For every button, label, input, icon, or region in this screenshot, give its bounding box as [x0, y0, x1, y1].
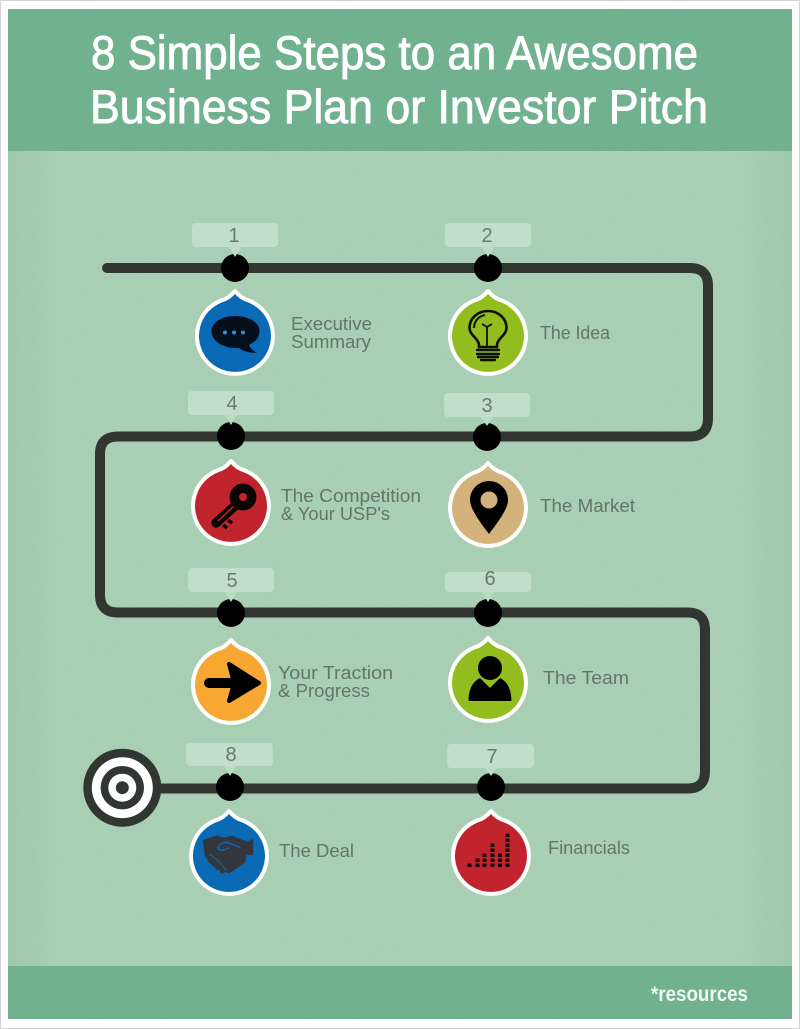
number tag 5	[188, 568, 274, 627]
step 2: The Idea	[445, 223, 611, 374]
number tag 1: 1	[228, 225, 240, 247]
label: Summary	[291, 332, 371, 352]
label: The Idea	[540, 323, 611, 343]
step 8: The Deal	[186, 743, 354, 894]
icon: map pin	[450, 463, 526, 546]
label: Financials	[548, 838, 630, 858]
number tag 4: 4	[226, 393, 238, 415]
label: Your Traction	[278, 663, 393, 683]
label: The Deal	[279, 841, 354, 861]
number tag 2	[445, 223, 531, 282]
label: Executive	[291, 314, 372, 334]
title	[90, 26, 708, 133]
number tag 6: 6	[484, 568, 496, 590]
winding road path	[100, 268, 708, 788]
title: 8 Simple Steps to an Awesome	[91, 26, 698, 79]
icon: arrow	[193, 640, 269, 723]
label: The Competition	[281, 486, 421, 506]
icon: bar chart	[453, 811, 529, 894]
number tag 7	[447, 744, 534, 801]
icon: key	[193, 461, 269, 544]
icon: speech bubble	[197, 291, 273, 374]
icon: handshake	[191, 811, 267, 894]
step 7: Financials	[447, 744, 630, 894]
step 6: The Team	[445, 568, 629, 721]
icon: finish target	[83, 749, 161, 827]
step 5: Your Traction	[188, 568, 393, 723]
icon: light bulb	[450, 291, 526, 374]
number tag 6	[445, 568, 531, 627]
number tag 1	[192, 223, 278, 282]
resources link: *resources	[651, 983, 748, 1006]
step 1: Executive Summary	[192, 223, 372, 374]
number tag 3: 3	[481, 395, 493, 417]
number tag 8: 8	[225, 744, 237, 766]
number tag 2: 2	[481, 225, 493, 247]
number tag 5: 5	[226, 570, 238, 592]
label: The Team	[543, 668, 629, 688]
number tag 7: 7	[486, 746, 498, 768]
panel: footer band	[8, 966, 792, 1019]
label: The Market	[540, 496, 635, 516]
number tag 8	[186, 743, 273, 801]
number tag 3	[444, 393, 530, 451]
step 4: The Competition	[188, 391, 421, 544]
label: & Progress	[278, 681, 370, 701]
icon: person	[450, 638, 526, 721]
panel: header band	[8, 9, 792, 151]
title: Business Plan or Investor Pitch	[90, 80, 708, 133]
label: & Your USP's	[281, 504, 390, 524]
step 3: The Market	[444, 393, 635, 546]
number tag 4	[188, 391, 274, 450]
